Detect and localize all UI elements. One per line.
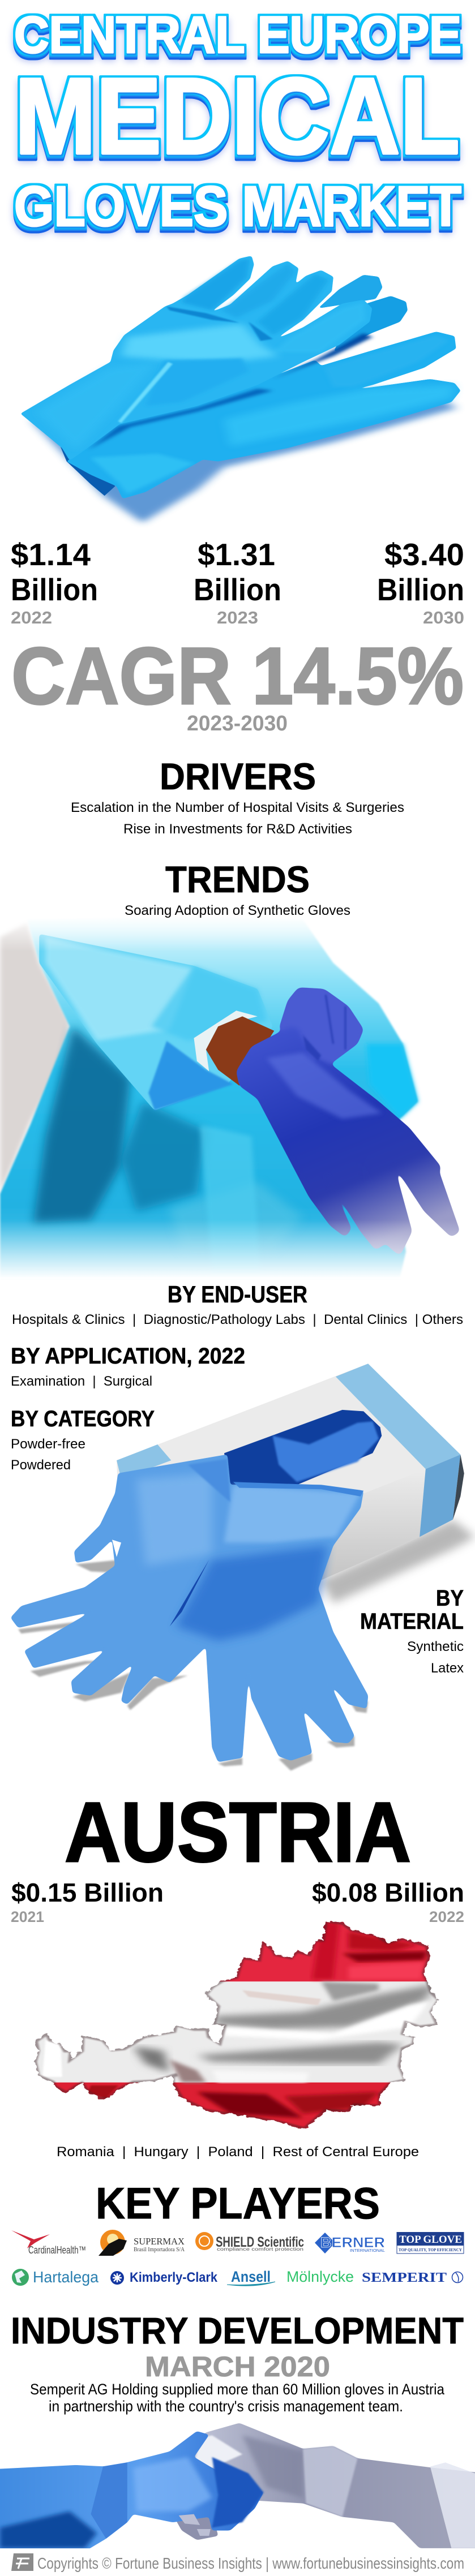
market size stat: 2023 [194,537,281,627]
Austria value 2022: 2022 [429,1908,464,1925]
market size stat: 2023: 2023 [217,608,258,627]
image: pair of cyan medical gloves [20,256,460,523]
image: gown and blue nitrile glove [0,914,475,1279]
heading: by material [360,1586,464,1634]
category list [11,1437,85,1473]
logo: Supermax: Brasil Importadora S/A [134,2247,185,2253]
Austria value 2021: 2021 [11,1908,44,1925]
category list: Powdered [11,1457,71,1473]
logo: Shield Scientific: SHIELD Scientific [216,2234,304,2250]
market size stat: 2022 [11,537,98,627]
market size stat: 2030 [377,537,464,627]
application list: Examination | Surgical [11,1374,152,1389]
market size stat: 2030: $3.40 [384,537,464,572]
other countries list: Romania | Hungary | Poland | Rest of Central Europe [57,2144,419,2160]
market size stat: 2023: $1.31 [198,537,275,572]
market size stat: 2030: 2030 [423,608,464,627]
icon: Fortune Business Insights mark [11,2553,33,2571]
Austria value 2021: $0.15 Billion [11,1878,164,1907]
logo: Molnlycke: Mölnlycke [286,2268,354,2285]
heading: Austria: AUSTRIA [65,1784,411,1880]
material list [407,1639,464,1676]
heading: drivers: DRIVERS [160,755,316,797]
logo: Top Glove [397,2232,464,2254]
logo: Shield Scientific: compliance comfort protection [217,2247,303,2252]
material list: Latex [431,1661,464,1676]
heading: by end-user: BY END-USER [168,1281,307,1308]
development description [30,2381,445,2415]
CAGR period: 2023-2030 [187,712,288,736]
title [14,6,461,238]
image: glove box with blue gloves [11,1364,475,1771]
logo: Supermax: SUPERMAX [134,2236,185,2247]
logo: Cardinal Health [11,2230,86,2256]
logo: Cardinal Health: CardinalHealth™ [28,2244,86,2256]
Austria value 2021 [11,1878,164,1925]
drivers list: Rise in Investments for R&D Activities [123,822,352,837]
logo: Ansell: Ansell [231,2268,271,2285]
heading: by application: BY APPLICATION, 2022 [11,1344,245,1369]
development date: MARCH 2020 [145,2351,330,2383]
logo: Berner: INTERNATIONAL [350,2249,385,2253]
logo: Supermax [99,2230,185,2256]
heading: key players: KEY PLAYERS [96,2178,380,2228]
heading: by material: BY [436,1586,464,1611]
market size stat: 2030: Billion [377,572,464,607]
market size stat: 2022: $1.14 [11,537,91,572]
heading: by material: MATERIAL [360,1609,464,1634]
logo: Kimberly-Clark: Kimberly-Clark [130,2270,218,2285]
market size stat: 2022: Billion [11,572,98,607]
logo: Top Glove: TOP QUALITY, TOP EFFICIENCY [399,2247,463,2252]
development description: in partnership with the country's crisis management team. [49,2398,403,2415]
Austria value 2022 [312,1878,464,1925]
drivers list: Escalation in the Number of Hospital Visits & Surgeries [71,800,404,815]
material list: Synthetic [407,1639,464,1654]
logo: Top Glove: TOP GLOVE [399,2234,462,2246]
Austria value 2022: $0.08 Billion [312,1878,464,1907]
map: Austria flag-textured country shape [34,1921,439,2128]
logo: Berner: BERNER [320,2235,385,2251]
drivers list [71,800,404,837]
logo: Berner [315,2233,385,2254]
logo: Semperit: SEMPERIT [362,2270,447,2285]
market size stat: 2023: Billion [194,572,281,607]
image: gloved handshake [0,2423,475,2554]
market size stat: 2022: 2022 [11,608,52,627]
category list: Powder-free [11,1437,85,1452]
heading: trends: TRENDS [165,858,310,900]
heading: by category: BY CATEGORY [11,1407,155,1431]
logo: Hartalega: Hartalega [33,2268,99,2286]
end-user list: Hospitals & Clinics | Diagnostic/Pathology Labs | Dental Clinics | Others [12,1312,463,1327]
trends text: Soaring Adoption of Synthetic Gloves [125,903,350,918]
logo: Shield Scientific [195,2232,304,2252]
